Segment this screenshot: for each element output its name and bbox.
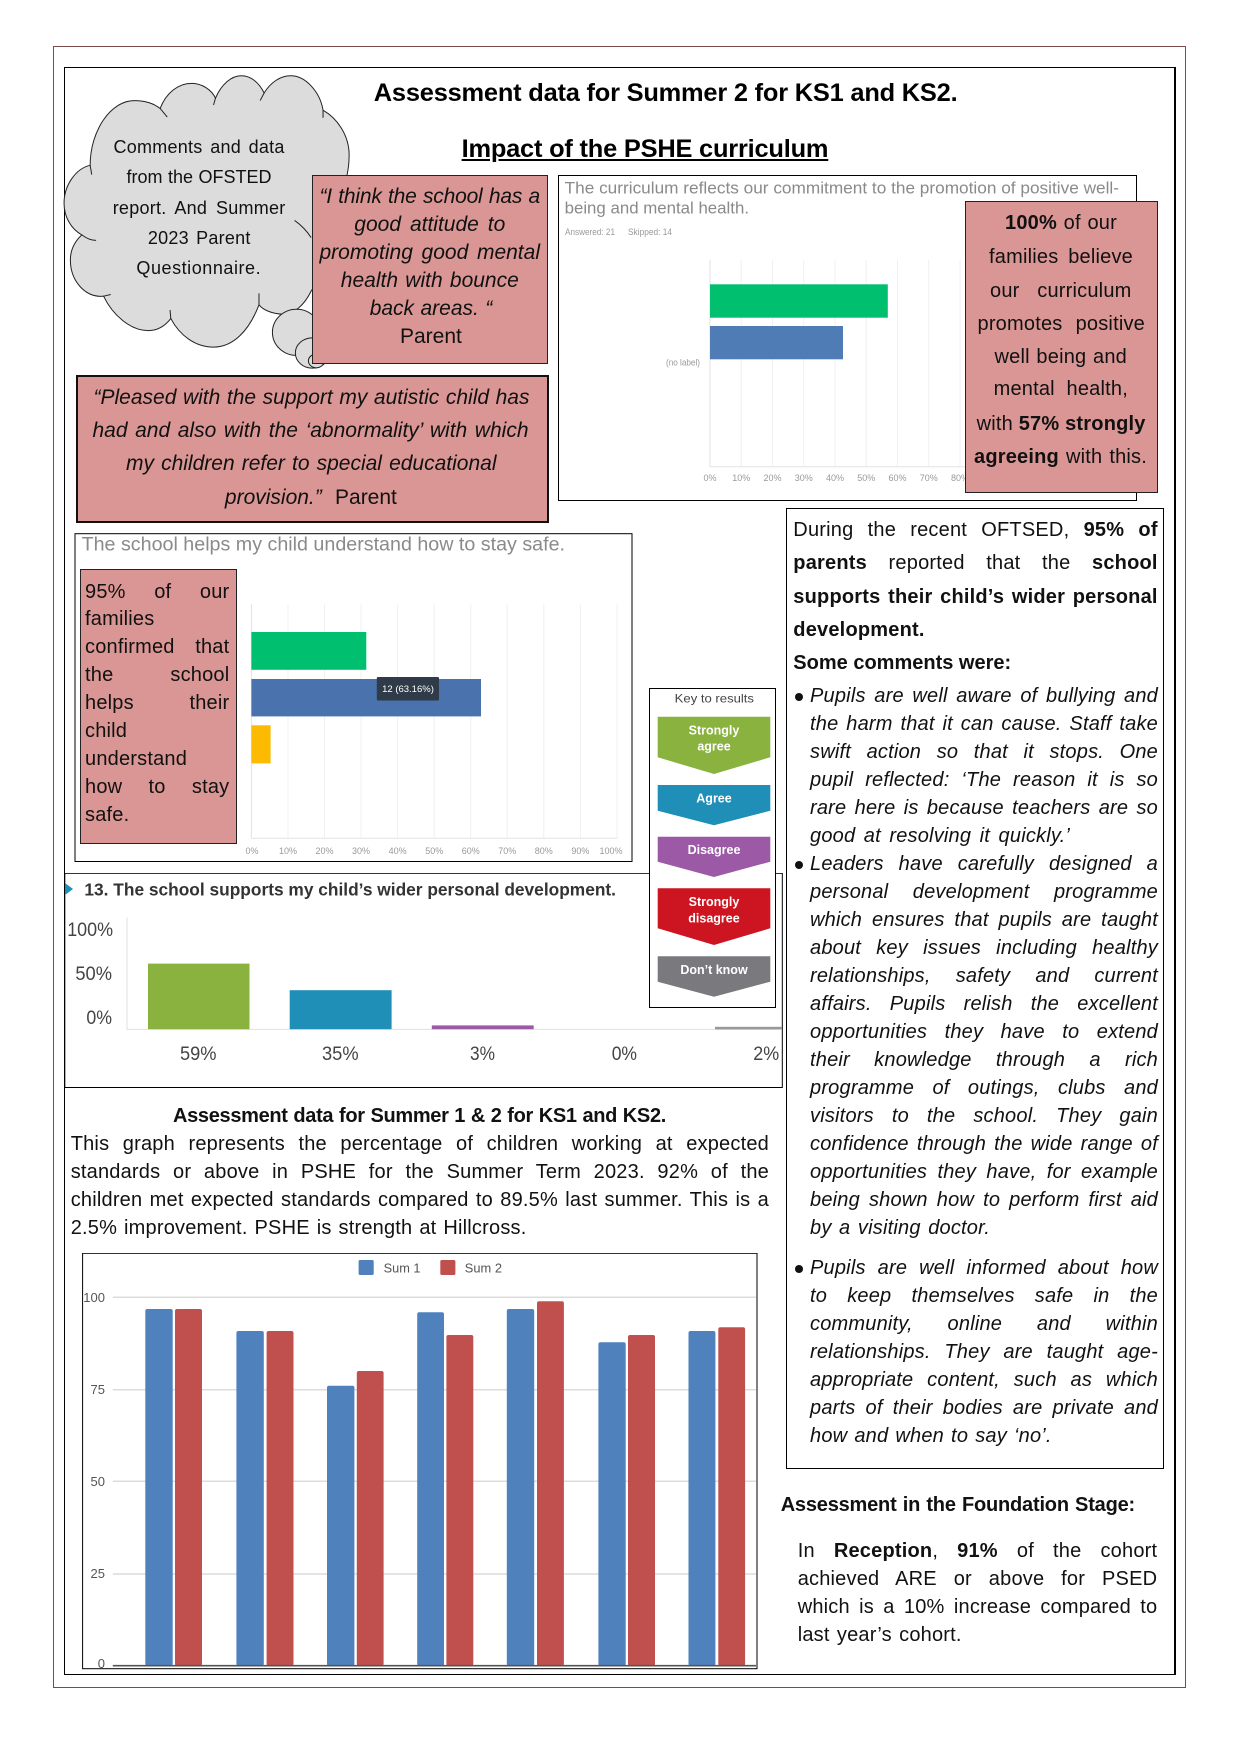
key: disagree: Disagree xyxy=(688,843,740,857)
x axis ticks: 70% xyxy=(498,846,516,856)
callout: 100% of families: our curriculum xyxy=(990,280,1132,302)
y axis labels xyxy=(67,919,113,1029)
Sum 1 bars xyxy=(145,1309,715,1666)
callout: 100% of families: 100% of our xyxy=(1005,212,1117,234)
tooltip: 12 (63.16%) xyxy=(377,677,439,700)
text block: Summer 1 and 2 assessment summary: standards or above in PSHE for the Summer Term 2023. 92% of the xyxy=(71,1161,769,1183)
bar: strongly agree xyxy=(251,632,366,670)
panel: OFSTED personal development comments: visitors to the school. They gain xyxy=(810,1105,1158,1127)
cloud callout: source of comments and data: report. And Summer xyxy=(113,198,285,218)
bullet dot 3 xyxy=(795,1265,803,1273)
quote: good attitude to mental health: “I think the school has a xyxy=(320,185,540,208)
x axis ticks: 10% xyxy=(279,846,297,856)
callout: 95% of families safe: confirmed that xyxy=(85,636,229,658)
gridlines xyxy=(251,604,617,838)
legend: Sum 2 xyxy=(465,1260,502,1275)
x axis ticks: 60% xyxy=(462,846,480,856)
panel: OFSTED personal development comments: programme of outings, clubs and xyxy=(810,1077,1158,1099)
section heading: Assessment in the Foundation Stage: xyxy=(781,1494,1135,1516)
quote: support for autistic child xyxy=(76,375,548,523)
panel: wider personal development bar chart xyxy=(65,873,783,1088)
key: strongly agree: agree xyxy=(697,740,731,754)
callout: 100% of families: mental health, xyxy=(994,378,1128,400)
x axis ticks: 40% xyxy=(826,473,844,483)
x axis ticks: 0% xyxy=(245,846,259,856)
baseline xyxy=(113,1665,756,1667)
panel: Sum 1 and Sum 2 attainment bar chart xyxy=(82,1253,758,1670)
panel: OFSTED personal development comments: parents reported that the school xyxy=(793,552,1158,574)
callout: 95% of families safe: families xyxy=(85,608,154,630)
panel: OFSTED personal development comments: community, online and within xyxy=(810,1313,1158,1335)
cloud callout: source of comments and data xyxy=(64,75,350,369)
callout: 100% of families: promotes positive xyxy=(978,313,1145,335)
percentage labels xyxy=(180,1043,779,1065)
quote: support for autistic child: had and also with the ‘abnormality’ with which xyxy=(92,419,528,442)
panel: OFSTED personal development comments: pupil reflected: ‘The reason it is so xyxy=(810,769,1158,791)
quote: good attitude to mental health: back areas. “ xyxy=(370,297,492,320)
callout: 100% of families: families believe xyxy=(989,246,1133,268)
bar: disagree xyxy=(251,725,271,763)
text block: Summer 1 and 2 assessment summary: children met expected standards compared to 89.5% last summer. This is a xyxy=(71,1189,769,1211)
x axis ticks: 100% xyxy=(599,846,623,856)
marker triangle xyxy=(65,883,73,895)
bar: agree 63.16% xyxy=(251,679,481,716)
quote: support for autistic child: provision.” Parent xyxy=(225,486,397,509)
key: strongly agree: Strongly xyxy=(689,723,739,737)
paragraph: This graph represents the percentage of children working at expected xyxy=(71,1133,769,1155)
callout: 95% of families safe: how to stay xyxy=(85,776,229,798)
panel: OFSTED personal development comments: Pupils are well informed about how xyxy=(810,1257,1158,1279)
panel: OFSTED personal development comments: to keep themselves safe in the xyxy=(810,1285,1158,1307)
x axis ticks: 20% xyxy=(763,473,782,483)
section heading: Assessment data for Summer 1 & 2 for KS1 and KS2. xyxy=(173,1105,666,1127)
bullet dot 1 xyxy=(795,693,803,701)
legend xyxy=(359,1260,502,1275)
comments subheading: Some comments were: xyxy=(793,652,1011,674)
x axis ticks: 10% xyxy=(732,473,750,483)
axes xyxy=(127,918,782,1029)
panel: OFSTED personal development comments: how and when to say ‘no’. xyxy=(810,1425,1052,1447)
percentage labels: 35% xyxy=(322,1043,359,1065)
key: strongly agree xyxy=(658,717,770,774)
heading: Impact of the PSHE curriculum: Impact of the PSHE curriculum xyxy=(462,134,828,162)
text block: Summer 1 and 2 assessment summary xyxy=(71,1105,769,1239)
quote: support for autistic child: my children refer to special educational xyxy=(126,452,496,475)
panel: OFSTED personal development comments: being shown how to perform first aid xyxy=(810,1189,1158,1211)
callout: 100% of families: with 57% strongly xyxy=(977,413,1146,435)
panel: OFSTED personal development comments: relationships, safety and current xyxy=(810,965,1158,987)
quote: good attitude to mental health: promoting good mental xyxy=(320,241,540,264)
chart heading: The school helps my child understand how to stay safe. xyxy=(82,534,565,555)
bar: strongly agree 59% xyxy=(148,964,250,1029)
cloud callout: source of comments and data: from the OFSTED xyxy=(126,167,272,187)
bar: agree 43% xyxy=(710,326,843,359)
x axis ticks: 50% xyxy=(857,473,875,483)
panel: OFSTED personal development comments: Pupils are well aware of bullying and xyxy=(810,685,1158,707)
callout: 95% of families safe: child xyxy=(85,720,127,742)
answered and skipped counts xyxy=(565,227,672,237)
cloud callout: source of comments and data: Questionnaire. xyxy=(136,258,261,278)
callout: 95% of families safe: 95% of our xyxy=(85,581,229,603)
callout: 100% of families: well being and xyxy=(994,346,1127,368)
panel: OFSTED personal development comments: affairs. Pupils relish the excellent xyxy=(810,993,1158,1015)
x axis ticks: 30% xyxy=(795,473,813,483)
panel: OFSTED personal development comments: about key issues including healthy xyxy=(810,937,1158,959)
bar: agree 35% xyxy=(290,990,392,1029)
quote: good attitude to mental health: good attitude to xyxy=(354,213,505,236)
panel: OFSTED personal development comments: swift action so that it stops. One xyxy=(810,741,1158,763)
chart heading: The curriculum reflects our commitment to the promotion of positive well- xyxy=(565,179,1119,197)
key: don't know xyxy=(658,956,770,997)
percentage labels: 2% xyxy=(753,1043,779,1065)
chart heading: being and mental health. xyxy=(565,199,749,217)
text block: Foundation Stage assessment: last year’s cohort. xyxy=(798,1624,962,1646)
y axis labels: 75 xyxy=(91,1382,105,1397)
intro statement: During the recent OFTSED, 95% of xyxy=(793,519,1158,541)
callout: 95% of families safe xyxy=(80,569,237,844)
y axis labels: 50 xyxy=(91,1474,105,1489)
legend: key to results xyxy=(649,688,776,1008)
key: strongly disagree: Strongly xyxy=(689,895,739,909)
x axis ticks: 80% xyxy=(951,473,969,483)
text block: Foundation Stage assessment: achieved ARE or above for PSED xyxy=(798,1568,1157,1590)
panel: curriculum survey bar chart xyxy=(558,175,1137,501)
chart heading xyxy=(565,179,1119,217)
quote: good attitude to mental health: Parent xyxy=(400,325,462,348)
panel: OFSTED personal development comments: opportunities they have, for example xyxy=(810,1161,1158,1183)
x axis ticks: 90% xyxy=(571,846,589,856)
percentage labels: 59% xyxy=(180,1043,216,1065)
panel: OFSTED personal development comments: development. xyxy=(793,619,925,641)
panel: OFSTED personal development comments: relationships. They are taught age- xyxy=(810,1341,1158,1363)
x axis ticks xyxy=(245,846,623,856)
key: agree: Agree xyxy=(696,792,732,806)
tooltip: 12 (63.16%): 12 (63.16%) xyxy=(382,684,434,695)
chart heading: 13. The school supports my child’s wider personal development. xyxy=(84,880,616,900)
y axis labels xyxy=(83,1290,105,1671)
text block: Foundation Stage assessment: which is a 10% increase compared to xyxy=(798,1596,1157,1618)
panel: OFSTED personal development comments: rare here is because teachers are so xyxy=(810,797,1158,819)
y axis labels: 50% xyxy=(75,963,112,985)
gridlines xyxy=(710,260,1020,467)
panel: OFSTED personal development comments: by a visiting doctor. xyxy=(810,1217,990,1239)
panel: OFSTED personal development comments: which ensures that pupils are taught xyxy=(810,909,1158,931)
key: strongly disagree: disagree xyxy=(688,911,740,925)
panel: OFSTED personal development comments: Leaders have carefully designed a xyxy=(810,853,1158,875)
legend heading: Key to results xyxy=(675,692,754,706)
x axis ticks: 30% xyxy=(352,846,370,856)
gridlines xyxy=(113,1297,756,1574)
panel: OFSTED personal development comments: parts of their bodies are private and xyxy=(810,1397,1158,1419)
x axis ticks: 20% xyxy=(315,846,334,856)
x axis ticks: 60% xyxy=(888,473,907,483)
paragraph: In Reception, 91% of the cohort xyxy=(798,1540,1157,1562)
icon: thought cloud shape xyxy=(64,75,350,369)
title: Assessment data for Summer 2 for KS1 and KS2. xyxy=(374,79,957,107)
panel: OFSTED personal development comments: appropriate content, such as which xyxy=(810,1369,1158,1391)
key: disagree xyxy=(658,837,770,877)
key: don't know: Don’t know xyxy=(680,963,748,977)
x axis ticks xyxy=(703,473,969,483)
text block: Foundation Stage assessment xyxy=(781,1494,1157,1646)
panel: OFSTED personal development comments: personal development programme xyxy=(810,881,1158,903)
panel: OFSTED personal development comments: good at resolving it quickly.’ xyxy=(810,825,1070,847)
answered and skipped counts: Answered: 21 xyxy=(565,227,615,237)
legend: Sum 1 xyxy=(384,1260,420,1275)
callout: 95% of families safe: the school xyxy=(85,664,229,686)
x axis ticks: 70% xyxy=(920,473,938,483)
cloud callout: source of comments and data: 2023 Parent xyxy=(148,228,251,248)
bar: don't know 2% xyxy=(715,1027,782,1029)
callout: 100% of families: agreeing with this. xyxy=(974,446,1147,468)
percentage labels: 3% xyxy=(470,1043,495,1065)
cloud text xyxy=(113,137,285,278)
callout: 95% of families safe: understand xyxy=(85,748,187,770)
axis label: no label: (no label) xyxy=(666,358,700,368)
x axis ticks: 40% xyxy=(389,846,407,856)
percentage labels: 0% xyxy=(612,1043,637,1065)
panel: OFSTED personal development comments: their knowledge through a rich xyxy=(810,1049,1158,1071)
x axis ticks: 0% xyxy=(703,473,717,483)
y axis labels: 100 xyxy=(83,1290,105,1305)
y axis labels: 0% xyxy=(86,1007,112,1029)
callout: 100% of families xyxy=(964,201,1158,493)
panel: OFSTED personal development comments: supports their child’s wider personal xyxy=(793,586,1158,608)
Sum 2 bars xyxy=(175,1301,745,1666)
key: strongly disagree xyxy=(658,888,770,945)
bar: strongly agree 57% xyxy=(710,284,888,318)
bullet dot 2 xyxy=(795,861,803,869)
bar: disagree 3% xyxy=(432,1025,534,1029)
quote: good attitude to mental health xyxy=(312,175,548,364)
y axis labels: 25 xyxy=(91,1566,105,1581)
quote: good attitude to mental health: health with bounce xyxy=(341,269,519,292)
callout: 95% of families safe: helps their xyxy=(85,692,229,714)
x axis ticks: 80% xyxy=(535,846,553,856)
cloud callout: source of comments and data: Comments and data xyxy=(114,137,285,157)
y axis labels: 100% xyxy=(67,919,113,941)
panel: OFSTED personal development comments: confidence through the wide range of xyxy=(810,1133,1158,1155)
quote: support for autistic child: “Pleased with the support my autistic child has xyxy=(94,386,530,409)
text block: Summer 1 and 2 assessment summary: 2.5% improvement. PSHE is strength at Hillcross. xyxy=(71,1217,526,1239)
panel: OFSTED personal development comments: opportunities they have to extend xyxy=(810,1021,1158,1043)
key: agree xyxy=(658,785,770,825)
callout: 95% of families safe: safe. xyxy=(85,804,129,826)
panel: OFSTED personal development comments: the harm that it can cause. Staff take xyxy=(810,713,1158,735)
panel: OFSTED personal development comments xyxy=(786,508,1164,1469)
x axis ticks: 50% xyxy=(425,846,443,856)
answered and skipped counts: Skipped: 14 xyxy=(628,227,672,237)
panel: staying safe survey bar chart xyxy=(74,533,632,862)
